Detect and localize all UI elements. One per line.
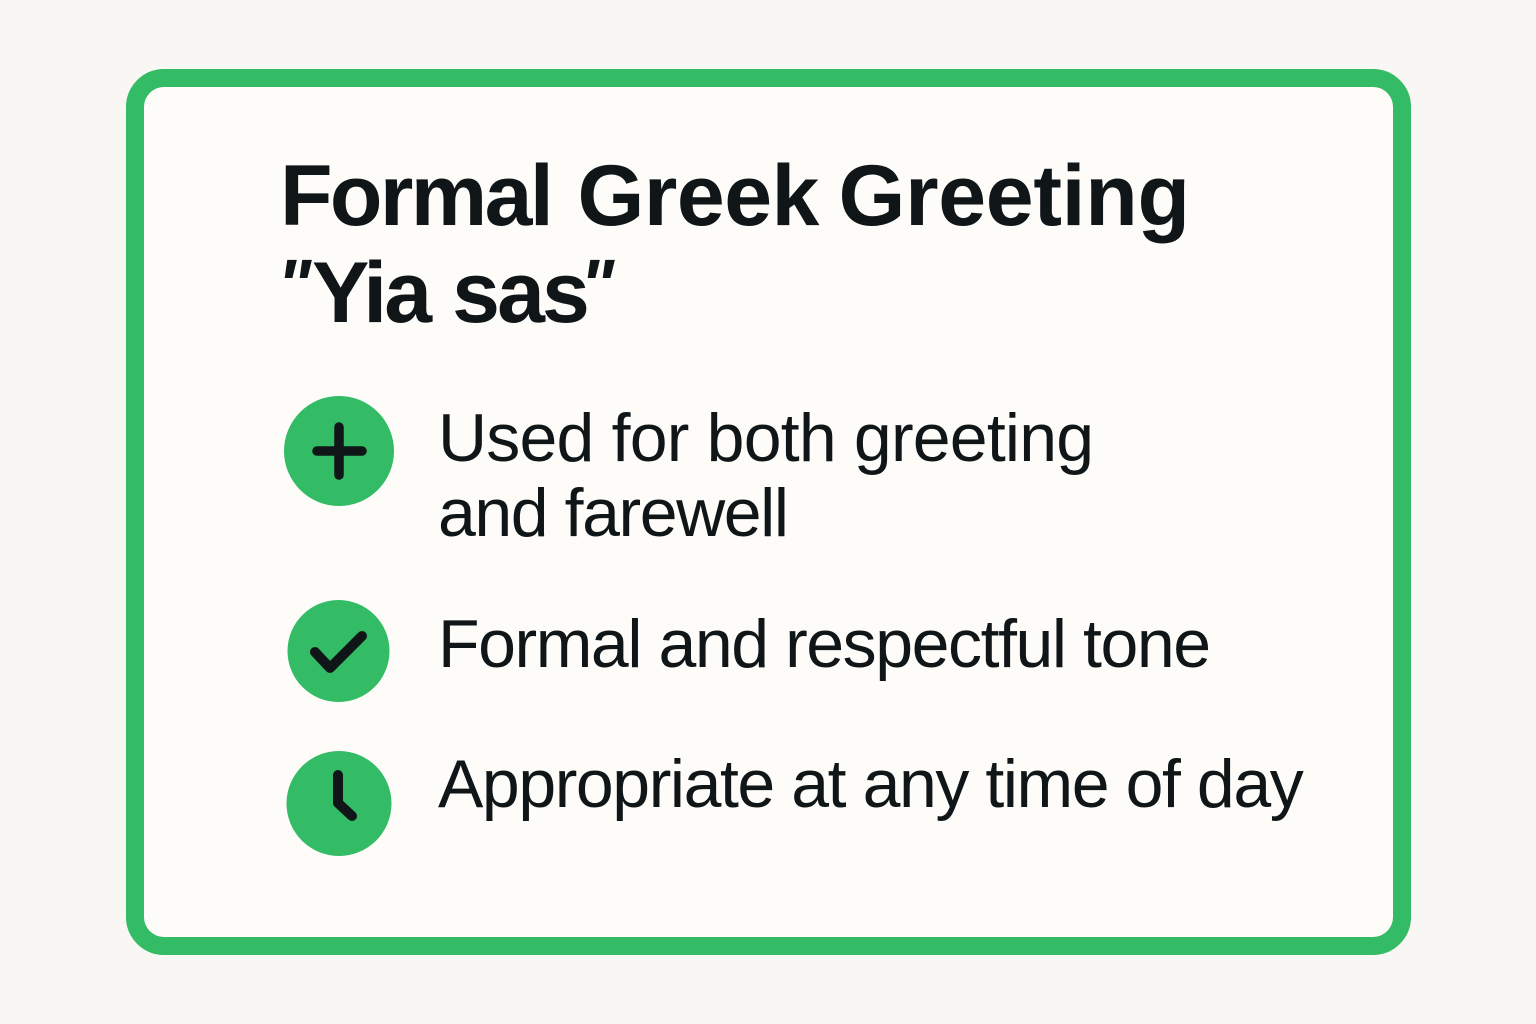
title [280,148,1190,244]
subtitle: phrase: " [277,246,311,326]
text: greeting and farewell: and farewell [438,475,788,551]
subtitle: phrase: Yia sas [312,245,587,341]
text: greeting and farewell [438,400,1093,551]
title: Greeting [838,148,1190,244]
icon: plus [284,396,394,506]
panel: greeting card [126,69,1411,955]
title: Greek [578,148,819,244]
text: any time of day: Appropriate at any time of day [438,746,1302,822]
text: formal tone: Formal and respectful tone [438,606,1210,682]
icon: check [288,600,390,702]
subtitle: phrase: " [580,246,614,326]
title: Formal [280,148,551,244]
icon: clock [286,751,392,856]
text: greeting and farewell: Used for both greeting [438,400,1093,476]
